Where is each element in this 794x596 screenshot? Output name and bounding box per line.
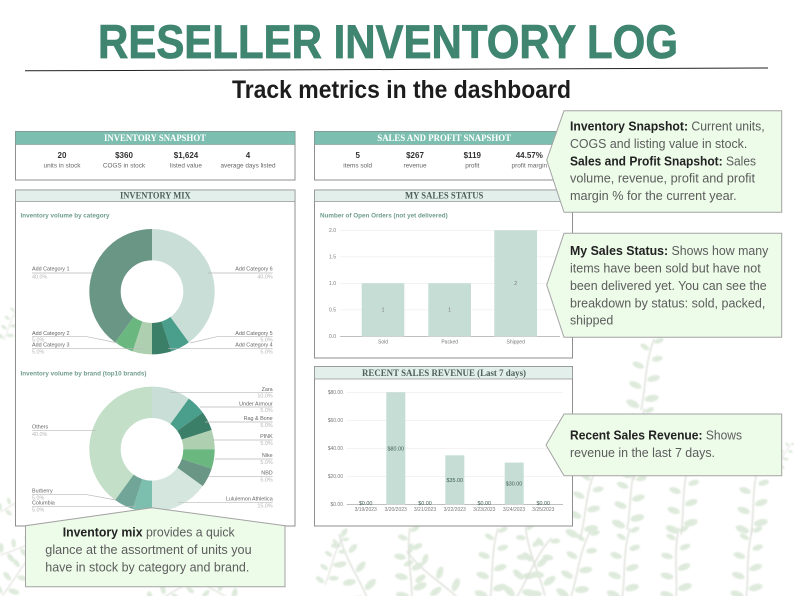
metric: listed value: $1,624 bbox=[174, 151, 199, 160]
title: RESELLER INVENTORY LOG bbox=[98, 15, 678, 68]
callout: snapshots: margin % for the current year. bbox=[570, 188, 737, 203]
label: Columbia bbox=[32, 501, 55, 514]
metric: revenue: $267 bbox=[406, 151, 424, 160]
bar chart: revenue: $60.00 bbox=[328, 418, 343, 424]
callout: my sales status: items have been sold but have not bbox=[570, 260, 761, 275]
label: Columbia: Columbia bbox=[32, 501, 55, 507]
bar chart: revenue bbox=[328, 390, 563, 513]
label: Rag & Bone: Rag & Bone bbox=[244, 416, 273, 422]
metric: revenue: revenue bbox=[403, 163, 427, 170]
bar chart: open orders: 2.0 bbox=[329, 228, 336, 234]
label: Others: Others bbox=[32, 425, 48, 431]
metric: average days listed: 4 bbox=[246, 151, 251, 160]
callout: inventory mix: glance at the assortment of units you bbox=[45, 542, 252, 557]
callout: my sales status: My Sales Status: Shows how many bbox=[570, 243, 769, 258]
callout: snapshots: Inventory Snapshot: Current units, bbox=[570, 119, 765, 134]
my sales status heading: MY SALES STATUS bbox=[405, 191, 483, 201]
metric: units in stock bbox=[44, 151, 81, 170]
label: Nike: Nike bbox=[262, 453, 273, 459]
callout: recent sales revenue bbox=[546, 414, 782, 476]
label: Others: 40.0% bbox=[32, 432, 47, 438]
subtitle: Track metrics in the dashboard bbox=[232, 76, 571, 104]
metric: listed value bbox=[170, 151, 202, 170]
label: category 2: Add Category 2 bbox=[32, 331, 69, 337]
inventory mix heading: INVENTORY MIX bbox=[120, 191, 191, 201]
chart title: by category: Inventory volume by category bbox=[20, 212, 110, 219]
bar chart: open orders bbox=[329, 228, 560, 346]
label: Under Armour: 5.0% bbox=[260, 408, 273, 414]
inventory mix header bbox=[16, 190, 295, 202]
title rule bbox=[25, 68, 768, 71]
label: Nike: 5.0% bbox=[260, 460, 273, 466]
callout: snapshots: volume, revenue, profit and profit bbox=[570, 171, 755, 186]
callout: my sales status: shipped bbox=[570, 313, 613, 328]
metric: average days listed: average days listed bbox=[220, 163, 276, 170]
bar chart: open orders: 0.0 bbox=[329, 334, 336, 340]
panel: inventory mix bbox=[16, 190, 295, 526]
callout: my sales status: breakdown by status: sold, packed, bbox=[570, 295, 765, 310]
label: Lululemon Athletica: 15.0% bbox=[257, 504, 273, 510]
label: category 3: Add Category 3 bbox=[32, 343, 69, 349]
metric: profit: profit bbox=[465, 163, 480, 170]
donut chart: category bbox=[105, 245, 199, 339]
metric: COGS in stock: COGS in stock bbox=[103, 163, 146, 170]
panel: my sales status bbox=[314, 190, 572, 358]
donut chart: brand bbox=[105, 402, 199, 496]
label: category 4 bbox=[235, 343, 273, 356]
sales snapshot header bbox=[314, 132, 572, 144]
bar chart: revenue: $0.00 bbox=[359, 501, 372, 507]
metric: profit margin: profit margin bbox=[512, 163, 547, 170]
label: category 5 bbox=[235, 331, 273, 344]
bar chart: revenue: 3/19/2023 bbox=[355, 507, 377, 513]
metric: revenue bbox=[403, 151, 427, 170]
panel: sales and profit snapshot bbox=[314, 132, 572, 180]
label: NBD: NBD bbox=[261, 471, 273, 477]
label: category 6 bbox=[235, 267, 273, 280]
label: Zara: 10.0% bbox=[257, 394, 273, 400]
bar chart: open orders: 2 bbox=[514, 281, 517, 287]
inventory snapshot heading: INVENTORY SNAPSHOT bbox=[104, 133, 206, 143]
metric: units in stock: units in stock bbox=[44, 163, 81, 170]
metric: profit margin: 44.57% bbox=[516, 151, 543, 160]
bar chart: open orders: 1.0 bbox=[329, 281, 336, 287]
panel: inventory snapshot bbox=[16, 132, 295, 180]
metric: items sold: 5 bbox=[355, 151, 360, 160]
category leader lines bbox=[32, 273, 273, 349]
bar chart: open orders: 1 bbox=[382, 308, 385, 314]
label: category 3: 5.0% bbox=[32, 350, 44, 356]
brand leader lines bbox=[32, 393, 273, 507]
callout: inventory mix bbox=[26, 508, 285, 587]
metric: COGS in stock bbox=[103, 151, 146, 170]
metric: COGS in stock: $360 bbox=[115, 151, 133, 160]
bar chart: revenue: $0.00 bbox=[537, 501, 550, 507]
label: Under Armour: Under Armour bbox=[239, 401, 273, 407]
label: category 6: Add Category 6 bbox=[235, 267, 273, 273]
bar chart: revenue: $20.00 bbox=[328, 474, 343, 480]
label: Burberry bbox=[32, 489, 53, 502]
bar chart: revenue: $35.00 bbox=[447, 478, 463, 484]
metric: items sold bbox=[343, 151, 373, 170]
background foliage bbox=[0, 302, 794, 596]
bar chart: revenue: $0.00 bbox=[418, 501, 432, 507]
callout: my sales status: been delivered yet. You can see the bbox=[570, 278, 767, 293]
label: category 1: 40.0% bbox=[32, 274, 47, 280]
callout: snapshots: Sales and Profit Snapshot: Sales bbox=[570, 153, 756, 168]
bar chart: open orders: 1.5 bbox=[329, 254, 336, 260]
bar chart: revenue: $40.00 bbox=[328, 446, 343, 452]
label: NBD: 5.0% bbox=[260, 478, 273, 484]
callout: inventory mix: have in stock by category and brand. bbox=[45, 559, 249, 574]
sales snapshot heading: SALES AND PROFIT SNAPSHOT bbox=[377, 133, 511, 143]
bar chart: revenue: 3/20/2023 bbox=[385, 507, 407, 513]
bar chart: revenue: 3/21/2023 bbox=[414, 507, 436, 513]
bar chart: revenue: 3/23/2023 bbox=[473, 507, 496, 513]
bar chart: revenue: $0.00 bbox=[478, 501, 491, 507]
bar chart: revenue: $30.00 bbox=[506, 482, 522, 488]
metric: profit margin bbox=[512, 151, 547, 170]
bar chart: revenue: 3/22/2023 bbox=[444, 507, 466, 513]
my sales status header bbox=[314, 190, 572, 202]
label: PINK bbox=[260, 434, 273, 447]
bar chart: revenue: $80.00 bbox=[388, 446, 404, 452]
callout: recent sales revenue: revenue in the last 7 days. bbox=[570, 445, 715, 460]
chart title: by brand: Inventory volume by brand (top10 brands) bbox=[20, 371, 146, 378]
bar chart: open orders: 0.5 bbox=[329, 308, 336, 314]
label: Zara: Zara bbox=[262, 387, 273, 393]
label: PINK: 5.0% bbox=[260, 441, 273, 447]
label: Under Armour bbox=[239, 401, 273, 414]
label: Lululemon Athletica bbox=[226, 496, 273, 510]
bar chart: revenue: 3/24/2023 bbox=[503, 507, 525, 513]
label: Others bbox=[32, 425, 48, 438]
metric: items sold: items sold bbox=[343, 163, 373, 170]
panel: recent sales revenue bbox=[314, 366, 572, 526]
recent sales header bbox=[314, 366, 572, 379]
bar chart: open orders: Sold bbox=[378, 340, 388, 346]
label: Columbia: 5.0% bbox=[32, 508, 44, 514]
callout: snapshots: COGS and listing value in stock. bbox=[570, 136, 747, 151]
label: category 5: Add Category 5 bbox=[235, 331, 273, 337]
label: category 4: Add Category 4 bbox=[235, 343, 273, 349]
label: category 2: 5.0% bbox=[32, 338, 44, 344]
metric: average days listed bbox=[220, 151, 276, 170]
label: Rag & Bone bbox=[244, 416, 273, 429]
bar chart: open orders: 1 bbox=[448, 308, 451, 314]
bar chart: open orders: Shipped bbox=[507, 340, 525, 346]
label: PINK: PINK bbox=[260, 434, 273, 440]
label: category 4: 5.0% bbox=[260, 350, 273, 356]
metric: profit bbox=[464, 151, 482, 170]
label: Lululemon Athletica: Lululemon Athletica bbox=[226, 496, 273, 502]
metric: listed value: listed value bbox=[170, 163, 202, 170]
bar chart: revenue: 3/25/2023 bbox=[532, 507, 555, 513]
bar chart: revenue: $80.00 bbox=[328, 390, 343, 396]
bar chart: revenue: $0.00 bbox=[330, 502, 343, 508]
recent sales heading: RECENT SALES REVENUE (Last 7 days) bbox=[362, 368, 526, 378]
label: category 2 bbox=[32, 331, 69, 344]
label: category 3 bbox=[32, 343, 69, 356]
label: category 5: 5.0% bbox=[260, 338, 273, 344]
metric: units in stock: 20 bbox=[58, 151, 67, 160]
callout: inventory mix: Inventory mix provides a quick bbox=[63, 525, 235, 540]
label: NBD bbox=[260, 471, 273, 484]
label: Nike bbox=[260, 453, 273, 466]
label: Burberry: 5.0% bbox=[32, 496, 44, 502]
label: Zara bbox=[257, 387, 273, 400]
inventory snapshot header bbox=[16, 132, 295, 144]
callout: recent sales revenue: Recent Sales Revenue: Shows bbox=[570, 428, 742, 443]
callout: my sales status bbox=[547, 233, 782, 337]
label: category 6: 40.0% bbox=[257, 274, 273, 280]
label: category 1 bbox=[32, 267, 69, 280]
chart title: open orders: Number of Open Orders (not yet delivered) bbox=[320, 212, 448, 219]
bar chart: open orders: Packed bbox=[441, 340, 458, 346]
callout: snapshots bbox=[547, 111, 782, 212]
label: Burberry: Burberry bbox=[32, 489, 53, 495]
metric: profit: $119 bbox=[464, 151, 482, 160]
label: category 1: Add Category 1 bbox=[32, 267, 69, 273]
label: Rag & Bone: 5.0% bbox=[260, 423, 273, 429]
